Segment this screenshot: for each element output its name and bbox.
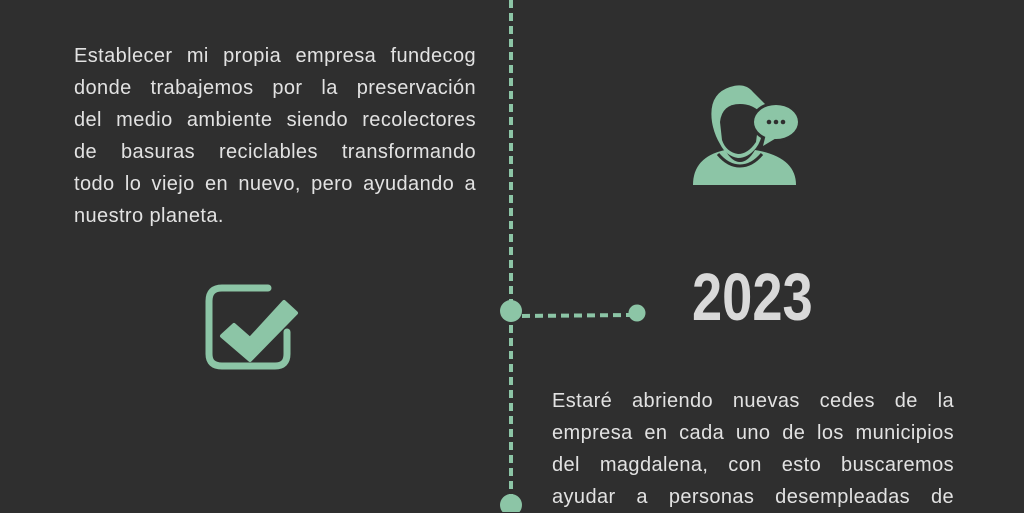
text block: 2023 plan: Estaré abriendo nuevas cedes de la <box>552 390 954 412</box>
text block: left goal: de basuras reciclables transformando <box>74 141 476 163</box>
text block: left goal <box>74 45 476 227</box>
icon: person with speech bubble <box>693 85 798 185</box>
year heading: 2023: 2023 <box>692 260 813 335</box>
text block: left goal: del medio ambiente siendo recolectores <box>74 109 476 131</box>
text block: left goal: donde trabajemos por la preservación <box>74 77 476 99</box>
text block: left goal: nuestro planeta. <box>74 205 224 227</box>
text block: 2023 plan: ayudar a personas desempleadas de <box>552 486 954 508</box>
text block: 2023 plan <box>552 390 954 508</box>
text block: 2023 plan: del magdalena, con esto buscaremos <box>552 454 954 476</box>
icon: checkbox <box>206 284 298 370</box>
text block: 2023 plan: empresa en cada uno de los municipios <box>552 422 954 444</box>
text block: left goal: Establecer mi propia empresa fundecog <box>74 45 476 67</box>
text block: left goal: todo lo viejo en nuevo, pero ayudando a <box>74 173 476 195</box>
